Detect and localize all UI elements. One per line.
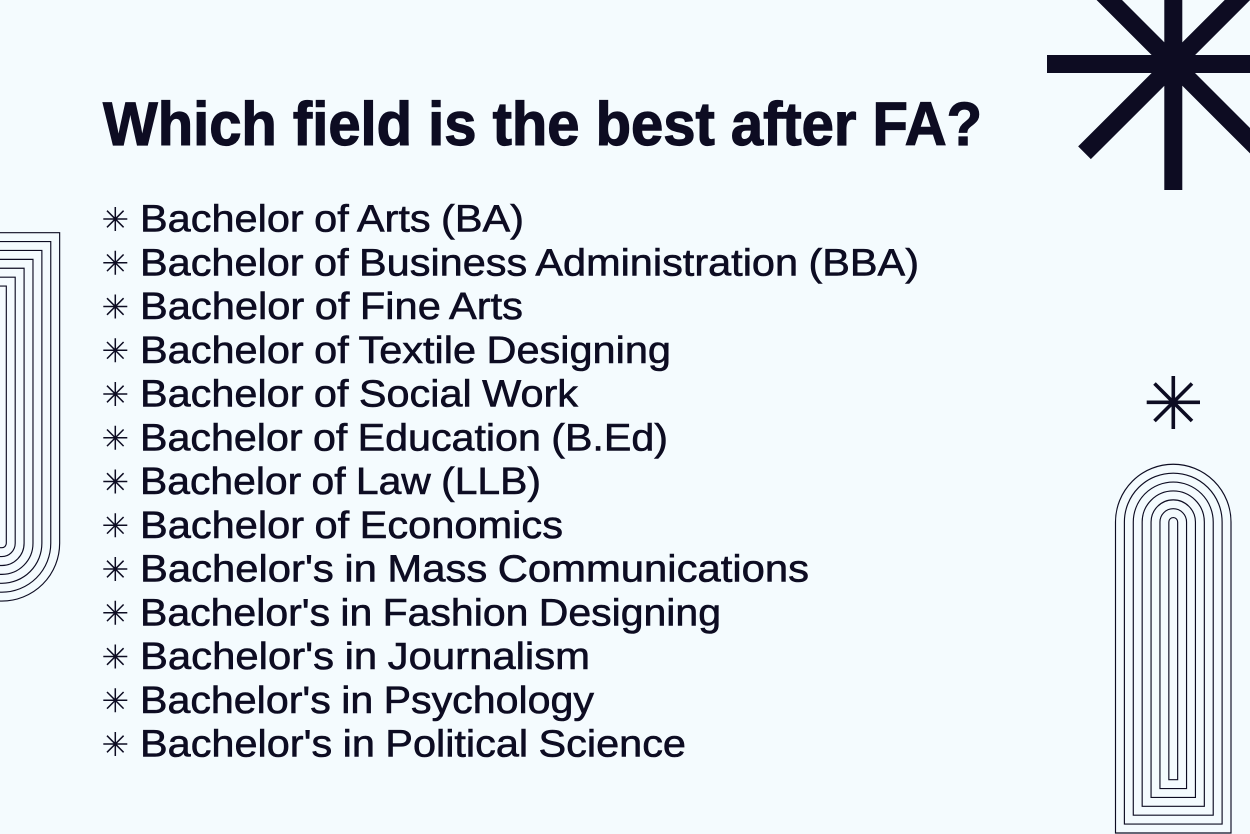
list item: Mass Communications: Bachelor's in Mass Communications — [140, 548, 809, 590]
list item: Business Administration: Bachelor of Business Administration (BBA) — [140, 242, 919, 284]
list item: Political Science: Bachelor's in Political Science — [140, 724, 686, 766]
list item: Journalism: Bachelor's in Journalism — [140, 636, 590, 678]
list item: Fashion Designing: Bachelor's in Fashion Designing — [140, 592, 721, 634]
list item: Law: Bachelor of Law (LLB) — [140, 461, 541, 503]
list item: Arts: Bachelor of Arts (BA) — [140, 198, 524, 240]
list item: Psychology: Bachelor's in Psychology — [140, 680, 594, 722]
decoration: concentric arch left — [0, 233, 60, 601]
title: Which field is the best after FA? — [103, 90, 982, 158]
decoration: concentric arch right — [1116, 464, 1231, 833]
list item: Social Work: Bachelor of Social Work — [140, 374, 579, 416]
icon: large asterisk top right — [1039, 0, 1250, 191]
list item: Fine Arts: Bachelor of Fine Arts — [140, 286, 523, 328]
list item: Education: Bachelor of Education (B.Ed) — [140, 417, 668, 459]
list item: Textile Designing: Bachelor of Textile Designing — [140, 330, 671, 372]
list of bachelor fields — [103, 198, 919, 766]
icon: small asterisk right — [1147, 376, 1200, 429]
list item: Economics: Bachelor of Economics — [140, 505, 563, 547]
